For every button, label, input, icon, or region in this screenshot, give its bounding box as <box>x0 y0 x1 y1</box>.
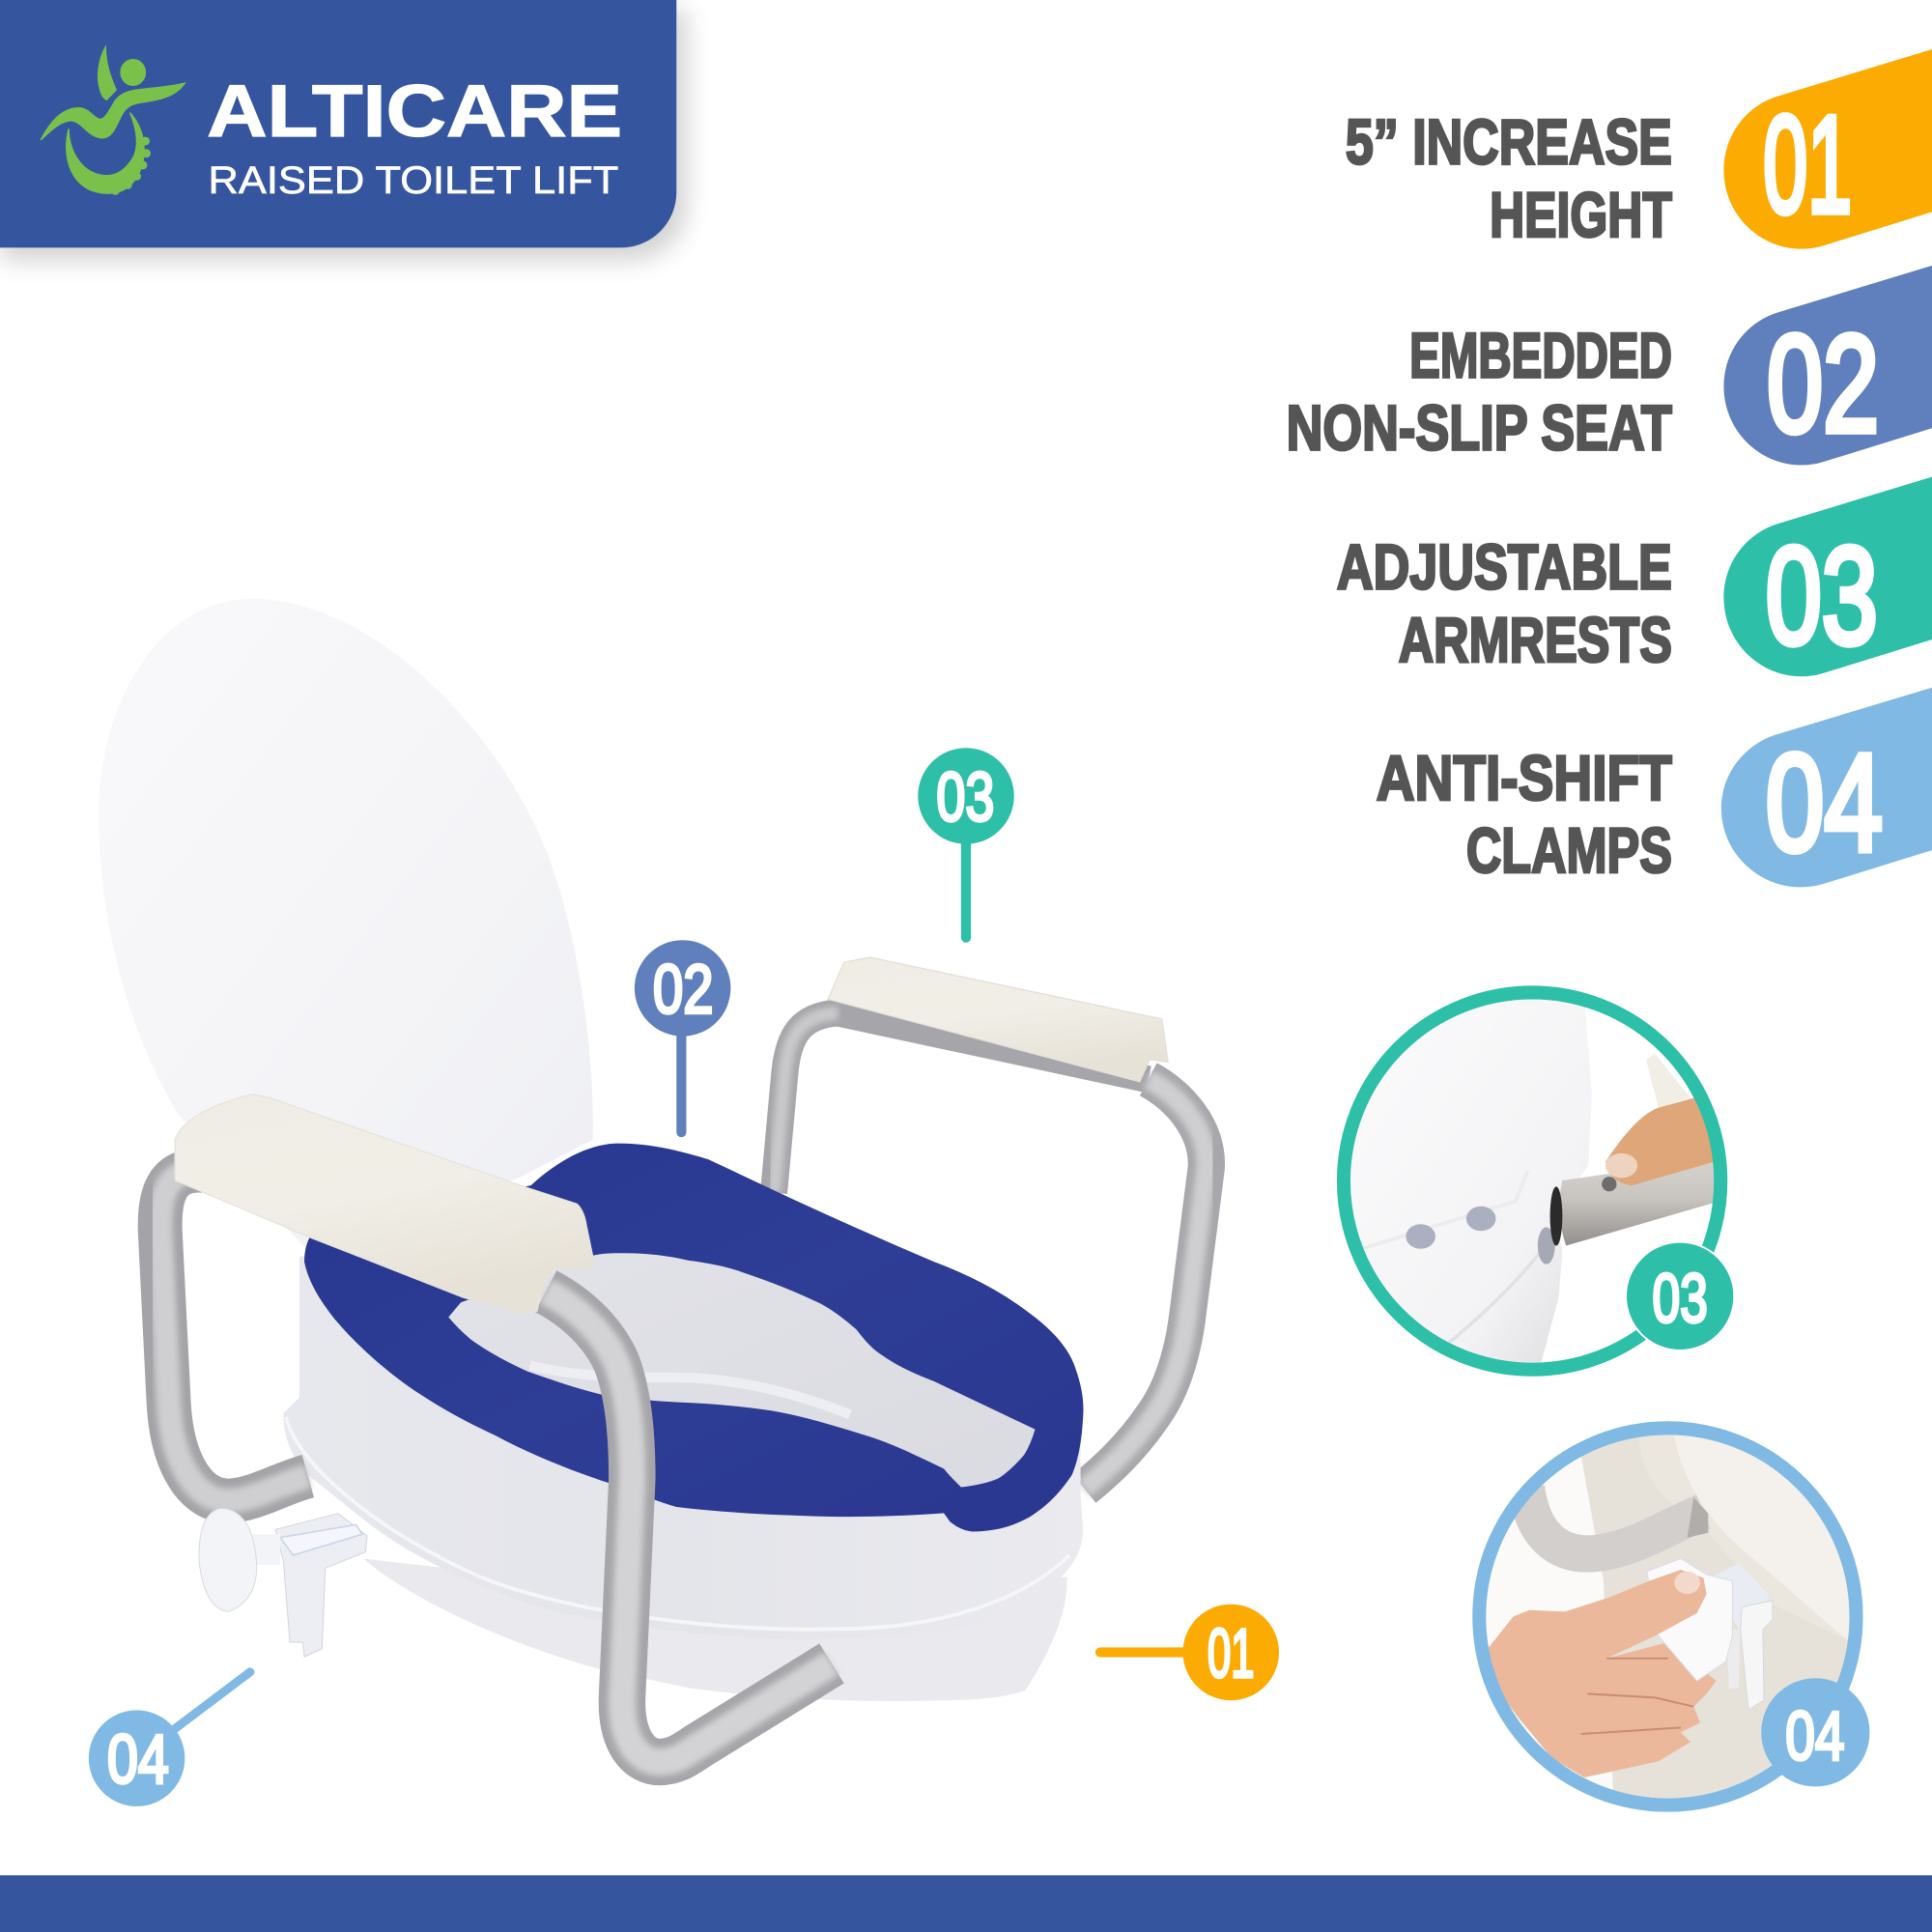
heading: anti-shift clamps <box>1377 743 1672 887</box>
near armrest pad <box>175 1094 594 1314</box>
near armrest frame <box>546 1292 832 1762</box>
feature 04 <box>1377 688 1932 887</box>
number 04: 04 <box>1766 726 1883 880</box>
anti-shift clamp <box>199 1509 367 1657</box>
number 02: 02 <box>1767 307 1879 461</box>
navy padded seat <box>304 1144 1083 1531</box>
heading: 5 inch increase height: 5” INCREASE <box>1346 107 1672 179</box>
far armrest frame <box>774 1012 1207 1489</box>
seat opening <box>448 1253 1035 1488</box>
heading: 5 inch increase height: HEIGHT <box>1490 180 1672 251</box>
ring <box>1479 1428 1857 1805</box>
toilet lid <box>99 599 593 1251</box>
brand name: ALTICARE <box>207 71 622 153</box>
bottom band <box>0 1875 1932 1932</box>
callout 04 on clamp: 04 <box>107 1721 169 1799</box>
callout 03 on armrest <box>918 748 1014 938</box>
callout 03 on armrest: 03 <box>936 758 994 836</box>
heading: embedded non-slip seat: EMBEDDED <box>1409 320 1672 391</box>
back-left armrest frame <box>160 1171 308 1501</box>
heading: embedded non-slip seat <box>1287 320 1672 465</box>
number tab 02 <box>1723 266 1932 466</box>
heading: 5 inch increase height <box>1346 107 1672 251</box>
photo: hand turning clamp knob <box>1489 1435 1849 1799</box>
number 03: 03 <box>1766 520 1878 673</box>
callout 04 on clamp <box>89 1672 250 1806</box>
product illustration: raised toilet seat with armrests <box>99 599 1207 1762</box>
header panel <box>0 0 686 260</box>
callout 01 on height <box>1100 1605 1279 1700</box>
lower base <box>363 1559 1067 1701</box>
badge 03 <box>1626 1242 1734 1350</box>
number tab 03 <box>1723 477 1932 676</box>
far armrest pad <box>828 957 1168 1082</box>
detail circle 04: clamp adjustment <box>1472 1422 1874 1816</box>
photo: finger pressing armrest pin <box>1362 1000 1714 1363</box>
callout 02 on seat: 02 <box>653 951 714 1028</box>
product name: RAISED TOILET LIFT <box>209 159 618 202</box>
feature 02 <box>1287 266 1932 466</box>
badge number 04: 04 <box>1785 1697 1844 1775</box>
heading: adjustable armrests: ARMRESTS <box>1399 605 1672 676</box>
heading: adjustable armrests: ADJUSTABLE <box>1337 532 1672 604</box>
callout 01 on height: 01 <box>1208 1615 1254 1692</box>
heading: anti-shift clamps: ANTI-SHIFT <box>1377 743 1672 814</box>
heading: embedded non-slip seat: NON-SLIP SEAT <box>1287 393 1672 465</box>
badge 04 <box>1761 1678 1869 1786</box>
ring <box>1344 992 1720 1370</box>
badge number 03: 03 <box>1652 1261 1708 1338</box>
number 01: 01 <box>1763 88 1852 242</box>
feature 03 <box>1337 477 1932 676</box>
callout 02 on seat <box>635 940 730 1132</box>
icon: Alticare logo <box>41 46 185 194</box>
feature 01 <box>1346 49 1932 251</box>
upper base <box>283 1208 1083 1639</box>
heading: anti-shift clamps: CLAMPS <box>1466 815 1672 887</box>
number tab 04 <box>1721 688 1932 887</box>
detail circle 03: armrest adjustment <box>1337 985 1734 1380</box>
number tab 01 <box>1723 49 1932 249</box>
heading: adjustable armrests <box>1337 532 1672 676</box>
